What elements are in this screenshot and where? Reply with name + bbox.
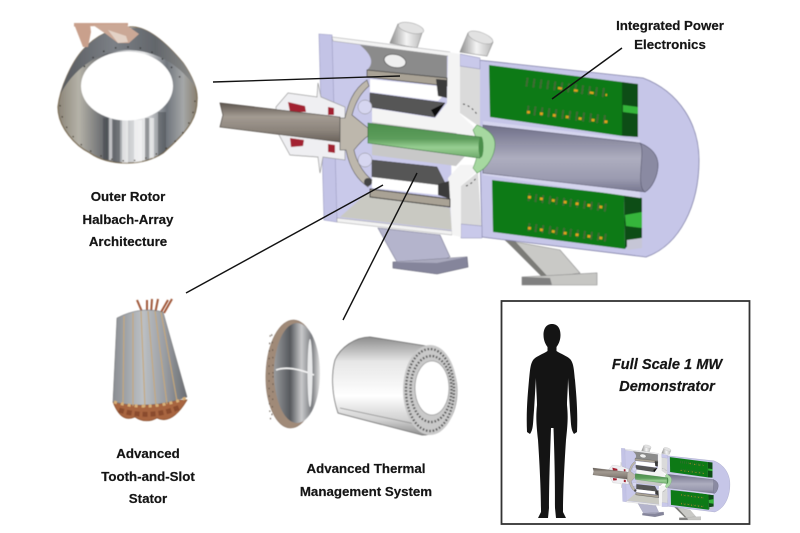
top rotor and stator section bbox=[367, 70, 447, 117]
rear support bracket bbox=[505, 240, 597, 285]
label: Full Scale 1 MW Demonstrator: Full Scale 1 MW bbox=[612, 357, 722, 373]
bottom rotor and stator section bbox=[370, 160, 450, 207]
label: Full Scale 1 MW Demonstrator: Demonstrator bbox=[619, 379, 716, 395]
label: Advanced Tooth-and-Slot Stator: Stator bbox=[129, 491, 167, 506]
main machine cutaway bbox=[220, 20, 699, 285]
front support bracket bbox=[378, 228, 468, 274]
power electronics boards bbox=[489, 65, 642, 250]
label: Advanced Tooth-and-Slot Stator: Tooth-and-Slot bbox=[101, 469, 195, 484]
label: Outer Rotor Halbach-Array Architecture: Halbach-Array bbox=[83, 212, 174, 227]
label: Integrated Power Electronics: Integrated Power bbox=[616, 18, 724, 33]
inset frame bbox=[502, 301, 750, 524]
front housing bbox=[319, 34, 482, 238]
input shaft bbox=[220, 103, 340, 142]
leader line: rotor bbox=[213, 76, 400, 82]
rotor end bell bbox=[340, 80, 372, 187]
label: Integrated Power Electronics: Electronics bbox=[634, 37, 706, 52]
centre bore bbox=[483, 121, 658, 198]
leader line: stator bbox=[186, 185, 383, 293]
label: Outer Rotor Halbach-Array Architecture: Architecture bbox=[89, 234, 167, 249]
leader line: thermal system bbox=[343, 173, 417, 320]
photo: thermal end dish bbox=[264, 319, 320, 429]
photo: thermal cooling cylinder bbox=[333, 337, 457, 435]
green hollow shaft bbox=[368, 123, 495, 173]
label: Advanced Tooth-and-Slot Stator: Advanced bbox=[116, 446, 180, 461]
label: Advanced Thermal Management System: Advanced Thermal bbox=[307, 461, 425, 476]
label: Outer Rotor Halbach-Array Architecture: Outer Rotor bbox=[91, 189, 165, 204]
photo: tooth-and-slot stator bbox=[113, 299, 187, 421]
small machine scale model bbox=[593, 444, 730, 520]
rear housing with dome bbox=[478, 60, 699, 257]
panel: full scale demonstrator inset bbox=[502, 301, 750, 524]
input shaft housing bbox=[276, 83, 345, 173]
photo: Halbach rotor ring bbox=[58, 23, 197, 164]
icon: human silhouette bbox=[527, 324, 577, 518]
leader line: power electronics bbox=[552, 48, 622, 99]
label: Advanced Thermal Management System: Management System bbox=[300, 484, 432, 499]
coolant ports bbox=[390, 20, 494, 56]
